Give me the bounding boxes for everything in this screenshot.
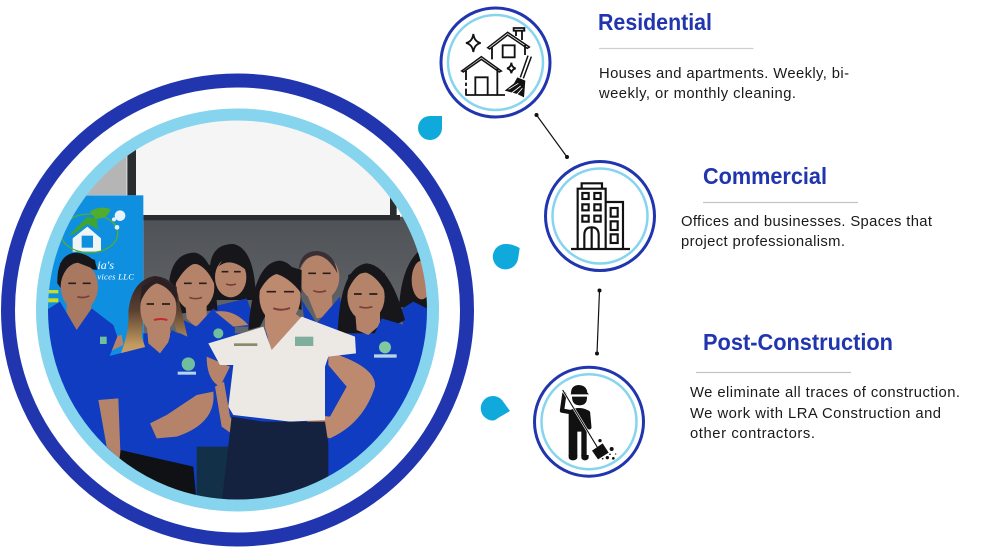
decorative drop 3 — [481, 396, 510, 420]
wall and screen — [143, 216, 418, 334]
back right-centre woman — [308, 296, 332, 318]
back centre woman — [210, 244, 256, 300]
heading: Commercial: Commercial — [703, 163, 827, 189]
body: residential: weekly, or monthly cleaning. — [598, 86, 796, 102]
team photo illustration — [48, 120, 427, 500]
connector: residential to commercial — [534, 113, 569, 159]
team photo illustration: vices LLC — [97, 271, 134, 281]
left woman — [57, 253, 97, 292]
outer navy ring — [8, 80, 467, 540]
heading: Post-Construction: Post-Construction — [703, 329, 893, 355]
team photo illustration: ia's — [97, 258, 114, 272]
body: residential: Houses and apartments. Weekly, bi- — [599, 66, 849, 82]
back left-centre woman — [169, 253, 217, 313]
inner light blue ring — [42, 114, 433, 506]
panel: team photo in double ring — [8, 80, 467, 540]
decorative drop 2 — [493, 244, 520, 269]
front left woman — [120, 276, 188, 354]
back right woman — [400, 252, 427, 308]
decorative drop 1 — [418, 116, 442, 140]
front right woman — [338, 263, 405, 333]
body: post-construction: We work with LRA Construction and — [690, 406, 941, 422]
text block: residential — [598, 9, 849, 102]
connector: commercial to post-construction — [595, 288, 602, 356]
text block: commercial — [681, 163, 932, 250]
icon: residential houses and broom — [441, 8, 550, 117]
body: commercial: Offices and businesses. Spaces that — [681, 214, 932, 230]
body: post-construction: other contractors. — [690, 426, 815, 442]
icon: post-construction worker sweeping — [534, 367, 644, 476]
text block: post-construction — [690, 329, 960, 442]
banner — [48, 195, 144, 356]
body: post-construction: We eliminate all traces of construction. — [690, 385, 960, 401]
icon: commercial buildings — [546, 162, 654, 270]
centre woman — [248, 261, 302, 330]
body: commercial: project professionalism. — [681, 234, 845, 250]
heading: Residential: Residential — [598, 9, 712, 35]
